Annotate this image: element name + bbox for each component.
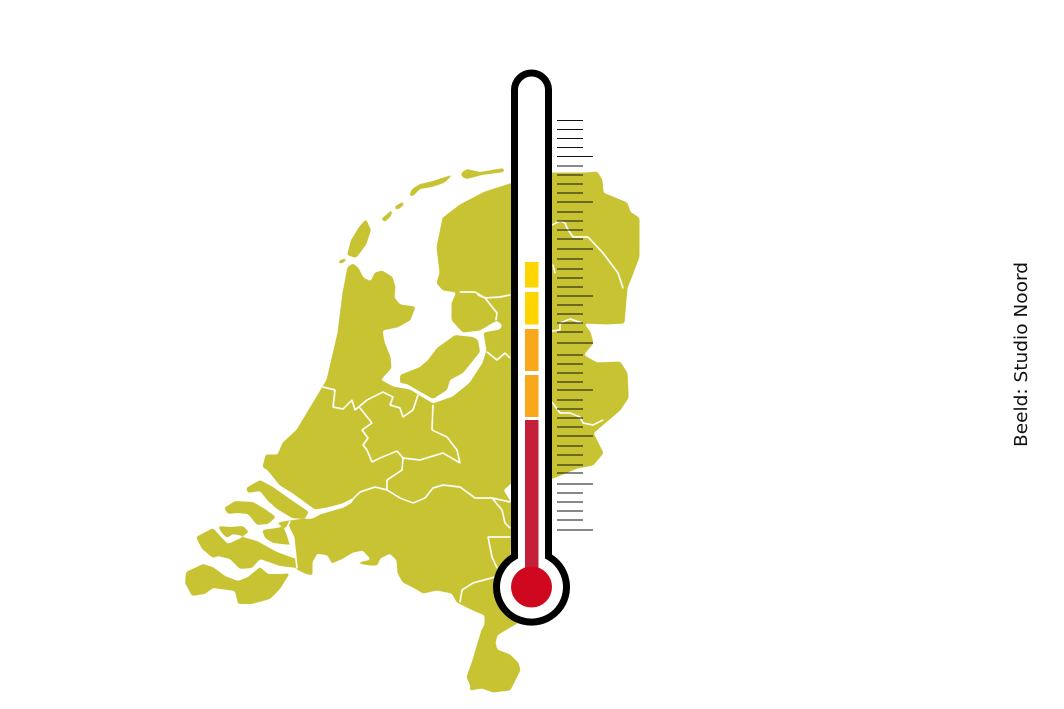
island: Ameland — [461, 168, 504, 179]
map: Flevoland — [400, 335, 480, 399]
map: Wadden islands — [338, 168, 504, 264]
island: Terschelling — [409, 174, 454, 196]
map: province borders — [286, 221, 623, 602]
island: Zeeuws-Vlaanderen — [185, 564, 290, 604]
thermometer: orange segment upper — [525, 329, 538, 371]
thermometer: red bulb — [511, 566, 552, 608]
island: Terschelling west — [394, 201, 404, 210]
thermometer: yellow segment upper — [525, 262, 538, 288]
island: Tholen — [262, 527, 291, 545]
map: land masses — [185, 168, 639, 692]
island: Sint Philipsland — [276, 520, 291, 528]
map: mainland — [263, 172, 639, 692]
island: Goeree-Overflakkee — [246, 480, 309, 518]
thermometer — [497, 73, 566, 622]
island: Schouwen-Duiveland — [224, 501, 276, 525]
photo credit: Beeld: Studio Noord — [1011, 262, 1032, 447]
island: Walcheren and Zuid-Beveland — [196, 528, 297, 569]
island: Texel — [347, 219, 371, 258]
thermometer: orange segment lower — [525, 375, 538, 417]
map: Zeeland and South Holland islands — [185, 480, 309, 604]
island: Noorderhaaks — [338, 258, 346, 264]
island: Vlieland — [381, 209, 393, 222]
thermometer: red column — [525, 420, 538, 570]
map of the Netherlands — [185, 168, 639, 692]
thermometer: yellow segment lower — [525, 292, 538, 324]
scale ticks — [557, 120, 593, 530]
island: Noord-Beveland — [218, 526, 249, 538]
thermometer: glass outline — [497, 73, 566, 622]
